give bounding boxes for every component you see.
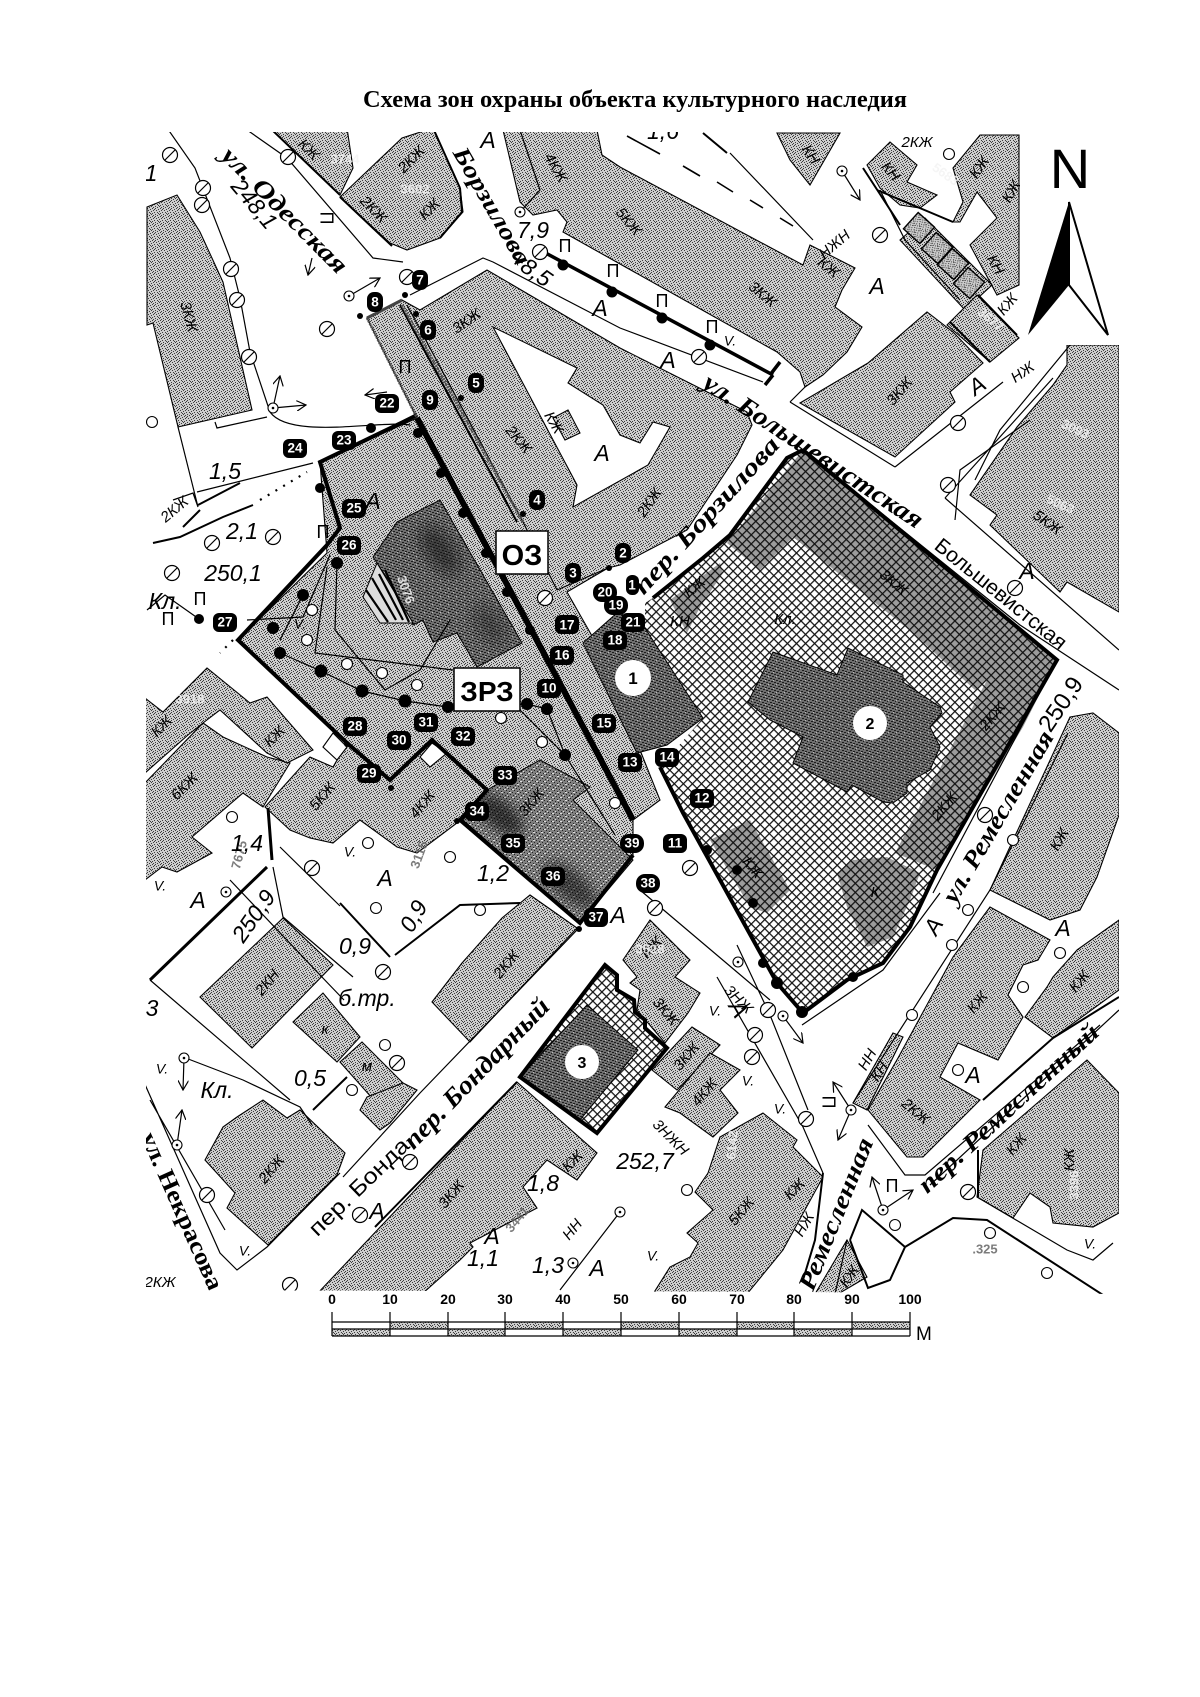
street names: Борзилова — [446, 142, 536, 270]
building labels: КЖ — [261, 722, 289, 751]
street names: ул. Ремесленная — [936, 726, 1060, 911]
scale bar: 100 — [898, 1291, 922, 1307]
numbered boundary points: 15 — [596, 716, 612, 730]
elevation and area annotations: А — [962, 370, 991, 402]
numbered boundary points: 27 — [217, 614, 233, 630]
street names: ул. Одесская — [213, 140, 353, 279]
elevation and area annotations: 1,4 — [231, 830, 263, 856]
building labels: КЖ — [540, 409, 567, 438]
numbered boundary points: 24 — [287, 440, 303, 456]
building labels: КЖ — [638, 933, 666, 962]
numbered boundary points: 23 — [336, 432, 352, 448]
poles and boundary points — [194, 260, 858, 1018]
elevation and area annotations: +8,5 — [505, 245, 557, 292]
numbered boundary points: 13 — [622, 754, 638, 770]
scale bar: М — [916, 1324, 932, 1345]
elevation and area annotations: А — [375, 865, 393, 891]
elevation and area annotations: 1,3 — [532, 1252, 564, 1278]
tree marks: V. — [724, 333, 736, 349]
street and fence lines — [143, 125, 1119, 1295]
building labels: КЖ — [416, 195, 444, 224]
zone boundary, object 2 — [653, 450, 1057, 1013]
building labels: КЖ — [681, 573, 710, 601]
elevation and area annotations: 1,5 — [209, 458, 241, 484]
street names: пер. Ремесленный — [913, 1019, 1105, 1199]
tree marks — [154, 333, 1096, 1264]
scale bar: 60 — [671, 1291, 687, 1307]
object number 2: 2 — [866, 716, 875, 733]
post symbols: П — [886, 1176, 898, 1196]
elevation and area annotations: 1,8 — [527, 1170, 559, 1196]
numbered boundary points: 11 — [668, 836, 683, 850]
elevation and area annotations: 248,1 — [225, 173, 283, 234]
cadastral numbers: 3093 — [1059, 416, 1092, 442]
street names: пер. Бондарный — [397, 992, 555, 1155]
scale bar — [328, 1291, 932, 1345]
lamp symbols — [162, 148, 1022, 1292]
numbered boundary points: 21 — [625, 614, 641, 630]
dark building in zone west — [363, 500, 522, 667]
scale bar: 40 — [555, 1291, 571, 1307]
numbered boundary points: 2 — [619, 546, 627, 560]
north arrow: N — [1050, 137, 1090, 200]
building labels: 3КЖ — [176, 300, 201, 335]
cadastral numbers: .325 — [972, 1241, 998, 1256]
zone boundary, ОЗ strip — [220, 300, 633, 820]
building labels: Кл. — [774, 611, 796, 628]
cadastral numbers: 3602 — [401, 181, 429, 196]
building labels: 3КЖ — [435, 1176, 469, 1212]
tree marks: V. — [294, 616, 306, 632]
elevation and area annotations: А — [963, 1062, 981, 1088]
building labels: 3НЖН — [649, 1116, 692, 1159]
post symbols: П — [162, 609, 174, 629]
numbered boundary points — [213, 270, 714, 927]
elevation and area annotations: А — [1053, 915, 1071, 941]
tree marks: V. — [1084, 1236, 1096, 1252]
numbered boundary points: 28 — [347, 718, 363, 734]
building labels: 5КЖ — [306, 778, 340, 814]
building labels: К — [871, 884, 881, 901]
post symbols: П — [607, 261, 619, 281]
building labels: НЖ — [1008, 358, 1039, 387]
numbered boundary points: 10 — [541, 680, 557, 696]
street names: пер. Бонда — [303, 1132, 415, 1241]
building labels: 5КЖ — [612, 204, 646, 240]
cadastral numbers: 3744 — [331, 151, 360, 166]
post symbols: П — [818, 1096, 838, 1108]
building labels: 4КЖ — [406, 786, 440, 822]
label ОЗ — [496, 531, 548, 574]
post symbols: П — [706, 317, 718, 337]
well nodes — [172, 166, 888, 1268]
numbered boundary points: 31 — [418, 714, 434, 730]
numbered boundary points: 14 — [659, 750, 675, 764]
building labels: КЖ — [994, 290, 1022, 319]
zone 3 hatch — [536, 968, 664, 1130]
building labels: КЖ — [559, 1147, 587, 1176]
elevation and area annotations: 1,2 — [477, 860, 509, 886]
numbered boundary points: 9 — [426, 392, 434, 408]
label ЗРЗ — [454, 668, 520, 711]
elevation and area annotations: А — [658, 347, 676, 373]
building labels: 3КЖ — [649, 994, 683, 1030]
building labels: КЖ — [1061, 1147, 1078, 1171]
building labels: НН — [559, 1216, 586, 1243]
building labels: КЖ — [836, 1262, 864, 1291]
building labels: КЖ — [814, 254, 843, 282]
tree marks: V. — [344, 844, 356, 860]
elevation and area annotations: А — [592, 440, 610, 466]
building labels: 2КЖ — [897, 1094, 934, 1129]
elevation and area annotations: 3 — [146, 995, 159, 1021]
numbered boundary points: 17 — [559, 618, 575, 632]
numbered boundary points: 32 — [455, 728, 471, 744]
cadastral numbers — [176, 151, 1092, 1256]
cadastral numbers: 7675 — [228, 839, 250, 871]
cadastral numbers: 3677 — [975, 304, 1007, 334]
building labels: КЖ — [781, 1175, 809, 1204]
scale bar: 90 — [844, 1291, 860, 1307]
numbered boundary points: 36 — [545, 868, 561, 884]
tree marks: V. — [239, 1243, 251, 1259]
cadastral numbers: 3441 — [502, 1203, 532, 1235]
dark building in zone south — [463, 760, 633, 923]
elevation and area annotations: А — [367, 1198, 385, 1224]
numbered boundary points: 39 — [624, 836, 640, 850]
building labels: КН — [867, 1059, 892, 1085]
numbered boundary points: 20 — [597, 584, 613, 600]
elevation and area annotations: 1,1 — [467, 1245, 499, 1271]
building labels: 2КЖ — [501, 422, 536, 458]
post symbols: П — [317, 522, 329, 542]
numbered boundary points: 25 — [346, 500, 362, 516]
tree marks: V. — [742, 1073, 754, 1089]
street names: ул. Большевистская — [695, 366, 929, 534]
elevation and area annotations: А — [587, 1255, 605, 1281]
building labels: КЖ — [999, 177, 1025, 206]
building labels: 4КЖ — [540, 150, 571, 186]
street names: ул. Некрасова — [135, 1128, 228, 1294]
numbered boundary points: 29 — [361, 766, 377, 780]
building labels: 2КЖ — [901, 134, 934, 151]
elevation and area annotations: А — [917, 913, 948, 941]
map — [135, 118, 1119, 1296]
tree marks: V. — [154, 878, 166, 894]
object number 1: 1 — [628, 669, 638, 688]
arrows — [177, 171, 913, 1210]
building labels: КЖ — [966, 153, 994, 182]
building labels: 3КЖ — [449, 305, 485, 337]
buildings — [145, 128, 1119, 1294]
building labels: 3КЖ — [883, 373, 917, 409]
numbered boundary points: 4 — [533, 492, 541, 508]
building labels: КН — [878, 159, 903, 185]
numbered boundary points: 33 — [497, 768, 513, 782]
numbered boundary points: 6 — [424, 322, 432, 338]
numbered boundary points: 16 — [554, 648, 570, 662]
building labels: НН — [855, 1046, 880, 1073]
building labels: 6КЖ — [168, 769, 202, 804]
label ОЗ: ОЗ — [502, 540, 542, 572]
numbered boundary points: 37 — [588, 910, 604, 924]
building labels: 2КЖ — [394, 142, 429, 177]
building labels: КН — [983, 252, 1008, 278]
building labels: КЖ — [739, 854, 767, 883]
cadastral numbers: 3528 — [636, 941, 664, 956]
M building row — [903, 212, 985, 299]
building labels: м — [362, 1058, 372, 1075]
building labels: КЖ — [964, 988, 992, 1017]
numbered boundary points: 38 — [640, 876, 656, 890]
scale bar: 70 — [729, 1291, 745, 1307]
elevation and area annotations: А — [363, 488, 381, 514]
cadastral numbers: 5063 — [1044, 491, 1077, 517]
scale bar: 50 — [613, 1291, 629, 1307]
building labels: НЖН — [816, 227, 854, 262]
numbered boundary points: 1 — [628, 578, 636, 592]
building labels: к — [321, 1021, 329, 1038]
building labels: КЖ — [1066, 967, 1094, 996]
label ЗРЗ: ЗРЗ — [460, 676, 514, 707]
street names: Ремесленная — [793, 1134, 879, 1296]
numbered boundary points: 18 — [607, 632, 623, 648]
building labels: 2КЖ — [489, 946, 524, 983]
tree marks: V. — [709, 1003, 721, 1019]
zone boundary, ЗРЗ — [238, 415, 633, 923]
object 1 building — [583, 612, 703, 753]
elevation and area annotations: б.тр. — [338, 985, 396, 1011]
building labels: 3КЖ — [745, 278, 781, 312]
building labels: КЖ — [1047, 825, 1073, 854]
numbered boundary points: 7 — [416, 272, 424, 288]
numbered boundary points: 8 — [371, 294, 379, 310]
elevation and area annotations: 250,1 — [203, 560, 262, 586]
elevation and area annotations: А — [1017, 558, 1035, 584]
building labels: 3КЖ — [515, 784, 549, 820]
scale bar: 80 — [786, 1291, 802, 1307]
tree marks: V. — [647, 1248, 659, 1264]
cadastral numbers: 3918 — [176, 691, 204, 706]
elevation and area annotations: А — [478, 127, 496, 153]
object number 2 — [853, 706, 887, 740]
post symbols — [162, 212, 898, 1196]
elevation and area annotations: 7,9 — [517, 217, 549, 243]
elevation and area annotations: А — [482, 1223, 500, 1249]
post symbols: П — [656, 291, 668, 311]
elevation and area annotations: А — [188, 887, 206, 913]
scale bar: 10 — [382, 1291, 398, 1307]
building labels: 3КЖ — [876, 566, 912, 600]
building labels: 4КЖ — [688, 1074, 722, 1110]
elevation and area annotations: А — [867, 273, 885, 299]
numbered boundary points: 35 — [505, 836, 521, 850]
object number 3 — [565, 1045, 599, 1079]
cadastral numbers: 5683 — [929, 160, 962, 189]
building labels: 3НЖ — [721, 982, 757, 1018]
building labels: 2КН — [251, 966, 283, 1000]
building labels: 2КЖ — [927, 788, 962, 825]
zone boundary, object 3 — [520, 965, 667, 1133]
building labels: НЖ — [791, 1209, 819, 1240]
elevation and area annotations: А — [608, 902, 626, 928]
numbered boundary points: 26 — [341, 538, 357, 552]
building labels: 2КЖ — [975, 698, 1010, 735]
elevation and area annotations: А — [723, 994, 754, 1022]
numbered boundary points: 22 — [379, 396, 395, 410]
elevation and area annotations: 250,9 — [226, 885, 281, 948]
street names: пер. Борзилова — [628, 432, 785, 600]
post symbols: П — [559, 236, 571, 256]
north arrow — [1028, 137, 1108, 335]
object 2 church — [748, 648, 942, 803]
elevation and area annotations: 2,1 — [225, 518, 258, 544]
elevation and area annotations: 0,9 — [394, 896, 433, 936]
street names: Большевистская — [930, 534, 1071, 654]
numbered boundary points: 3 — [569, 566, 577, 580]
building labels: 2КЖ — [254, 1151, 289, 1188]
elevation and area annotations: 252,7 — [615, 1148, 675, 1174]
elevation and area annotations: 1 — [145, 160, 157, 186]
building labels: 5КЖ — [725, 1193, 759, 1229]
scale bar: 30 — [497, 1291, 513, 1307]
title: Схема зон охраны объекта культурного наследия — [363, 87, 907, 113]
small circles — [146, 148, 1066, 1278]
post symbols: П — [316, 212, 336, 224]
elevation and area annotations: 0,5 — [294, 1065, 326, 1091]
protection zone hatch, object 2 — [645, 450, 1057, 1013]
scale bar: 20 — [440, 1291, 456, 1307]
building labels: КН — [798, 142, 823, 168]
cadastral numbers: 6142 — [723, 1130, 741, 1160]
numbered boundary points: 30 — [391, 732, 407, 748]
building labels: КН — [670, 613, 690, 630]
cadastral numbers: 3076 — [394, 573, 418, 606]
building labels: КЖ — [294, 136, 323, 164]
street names: 250,9 — [1033, 672, 1089, 737]
street names — [135, 140, 1105, 1296]
elevation and area annotations: 0,9 — [339, 933, 371, 959]
numbered boundary points: 19 — [608, 598, 624, 612]
building labels: КЖ — [148, 712, 176, 741]
building labels: 5КЖ — [1030, 507, 1066, 539]
building labels: 2КЖ — [144, 1274, 177, 1291]
numbered boundary points: 12 — [694, 790, 710, 806]
numbered boundary points: 34 — [469, 804, 485, 818]
building labels: КЖ — [1003, 1130, 1031, 1159]
object 3 building — [520, 1005, 638, 1120]
object number 3: 3 — [578, 1055, 587, 1072]
elevation and area annotations: 1,6 — [647, 118, 679, 144]
elevation and area annotations: А — [590, 295, 608, 321]
scale bar: 0 — [328, 1291, 336, 1307]
elevation and area annotations: Кл. — [201, 1077, 233, 1103]
post symbols: П — [194, 589, 206, 609]
cadastral numbers: 3115 — [407, 839, 431, 870]
building labels — [144, 134, 1094, 1291]
elevation and area annotations: Кл. — [149, 588, 181, 614]
building labels: 2КЖ — [157, 492, 193, 527]
courtyards and white plots — [323, 327, 670, 767]
numbered boundary points: 5 — [472, 376, 480, 390]
object number 1 — [615, 660, 651, 696]
tree marks: V. — [156, 1061, 168, 1077]
building labels: 2КЖ — [633, 484, 666, 521]
cadastral numbers: 3396 — [1066, 1171, 1081, 1199]
building labels: 3КЖ — [670, 1038, 704, 1074]
tree marks: V. — [774, 1101, 786, 1117]
building labels: 2КЖ — [356, 192, 391, 227]
elevation and area annotations — [145, 118, 1071, 1281]
post symbols: П — [399, 357, 411, 377]
